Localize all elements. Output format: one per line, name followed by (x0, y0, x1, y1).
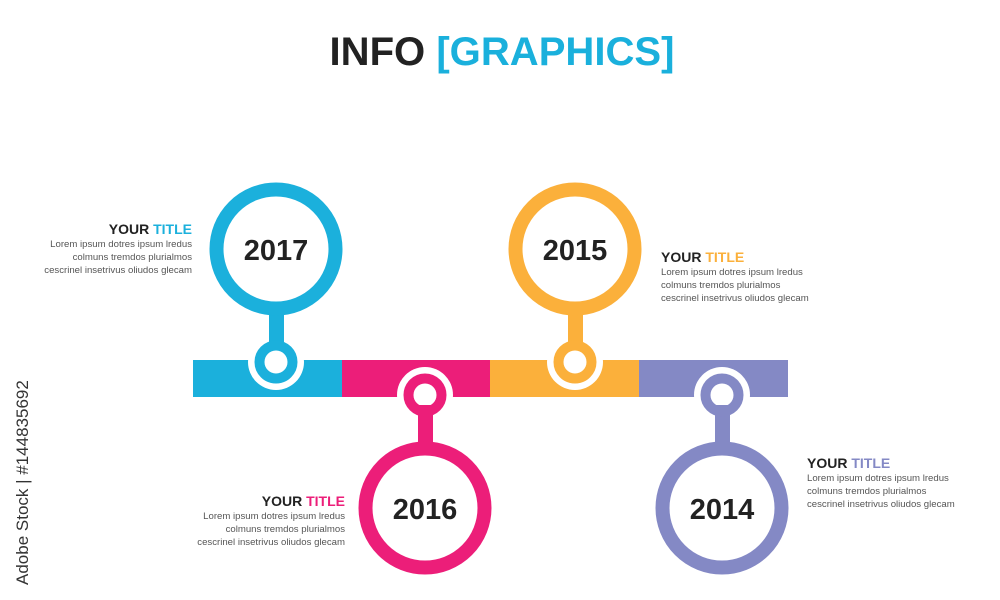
timeline bar (193, 360, 788, 397)
text block: 2017: colmuns tremdos plurialmos (73, 252, 192, 263)
marker: 2015 (516, 190, 634, 390)
text block: 2014: cescrinel insetrivus oliudos glecam (807, 499, 955, 510)
text block: 2017 (44, 221, 192, 276)
marker: 2017: 2017 (244, 235, 308, 267)
text block: 2016: YOUR TITLE (262, 493, 345, 509)
text block: 2016: cescrinel insetrivus oliudos glecam (197, 537, 345, 548)
text block: 2014: YOUR TITLE (807, 455, 890, 471)
text block: 2015: YOUR TITLE (661, 249, 744, 265)
text block: 2016 (197, 493, 345, 548)
marker: 2014: 2014 (690, 494, 754, 526)
text block: 2017: cescrinel insetrivus oliudos glecam (44, 265, 192, 276)
watermark side text: Adobe Stock | #144835692 (13, 380, 32, 585)
text block: 2017: Lorem ipsum dotres ipsum lredus (50, 239, 192, 250)
text block: 2015: colmuns tremdos plurialmos (661, 280, 781, 291)
text block: 2014: Lorem ipsum dotres ipsum lredus (807, 473, 949, 484)
marker: 2014 (662, 367, 782, 568)
text block: 2016: Lorem ipsum dotres ipsum lredus (203, 511, 345, 522)
text block: 2015: Lorem ipsum dotres ipsum lredus (661, 267, 803, 278)
marker: 2016 (366, 367, 484, 568)
text block: 2014 (807, 455, 955, 510)
marker: 2016: 2016 (393, 494, 457, 526)
text block: 2017: YOUR TITLE (109, 221, 192, 237)
marker: 2017 (216, 190, 336, 390)
text block: 2015: cescrinel insetrivus oliudos glecam (661, 293, 809, 304)
text block: 2014: colmuns tremdos plurialmos (807, 486, 927, 497)
text block: 2016: colmuns tremdos plurialmos (226, 524, 345, 535)
marker: 2015: 2015 (543, 235, 607, 267)
title: INFO [GRAPHICS] (330, 30, 674, 74)
text block: 2015 (661, 249, 809, 304)
